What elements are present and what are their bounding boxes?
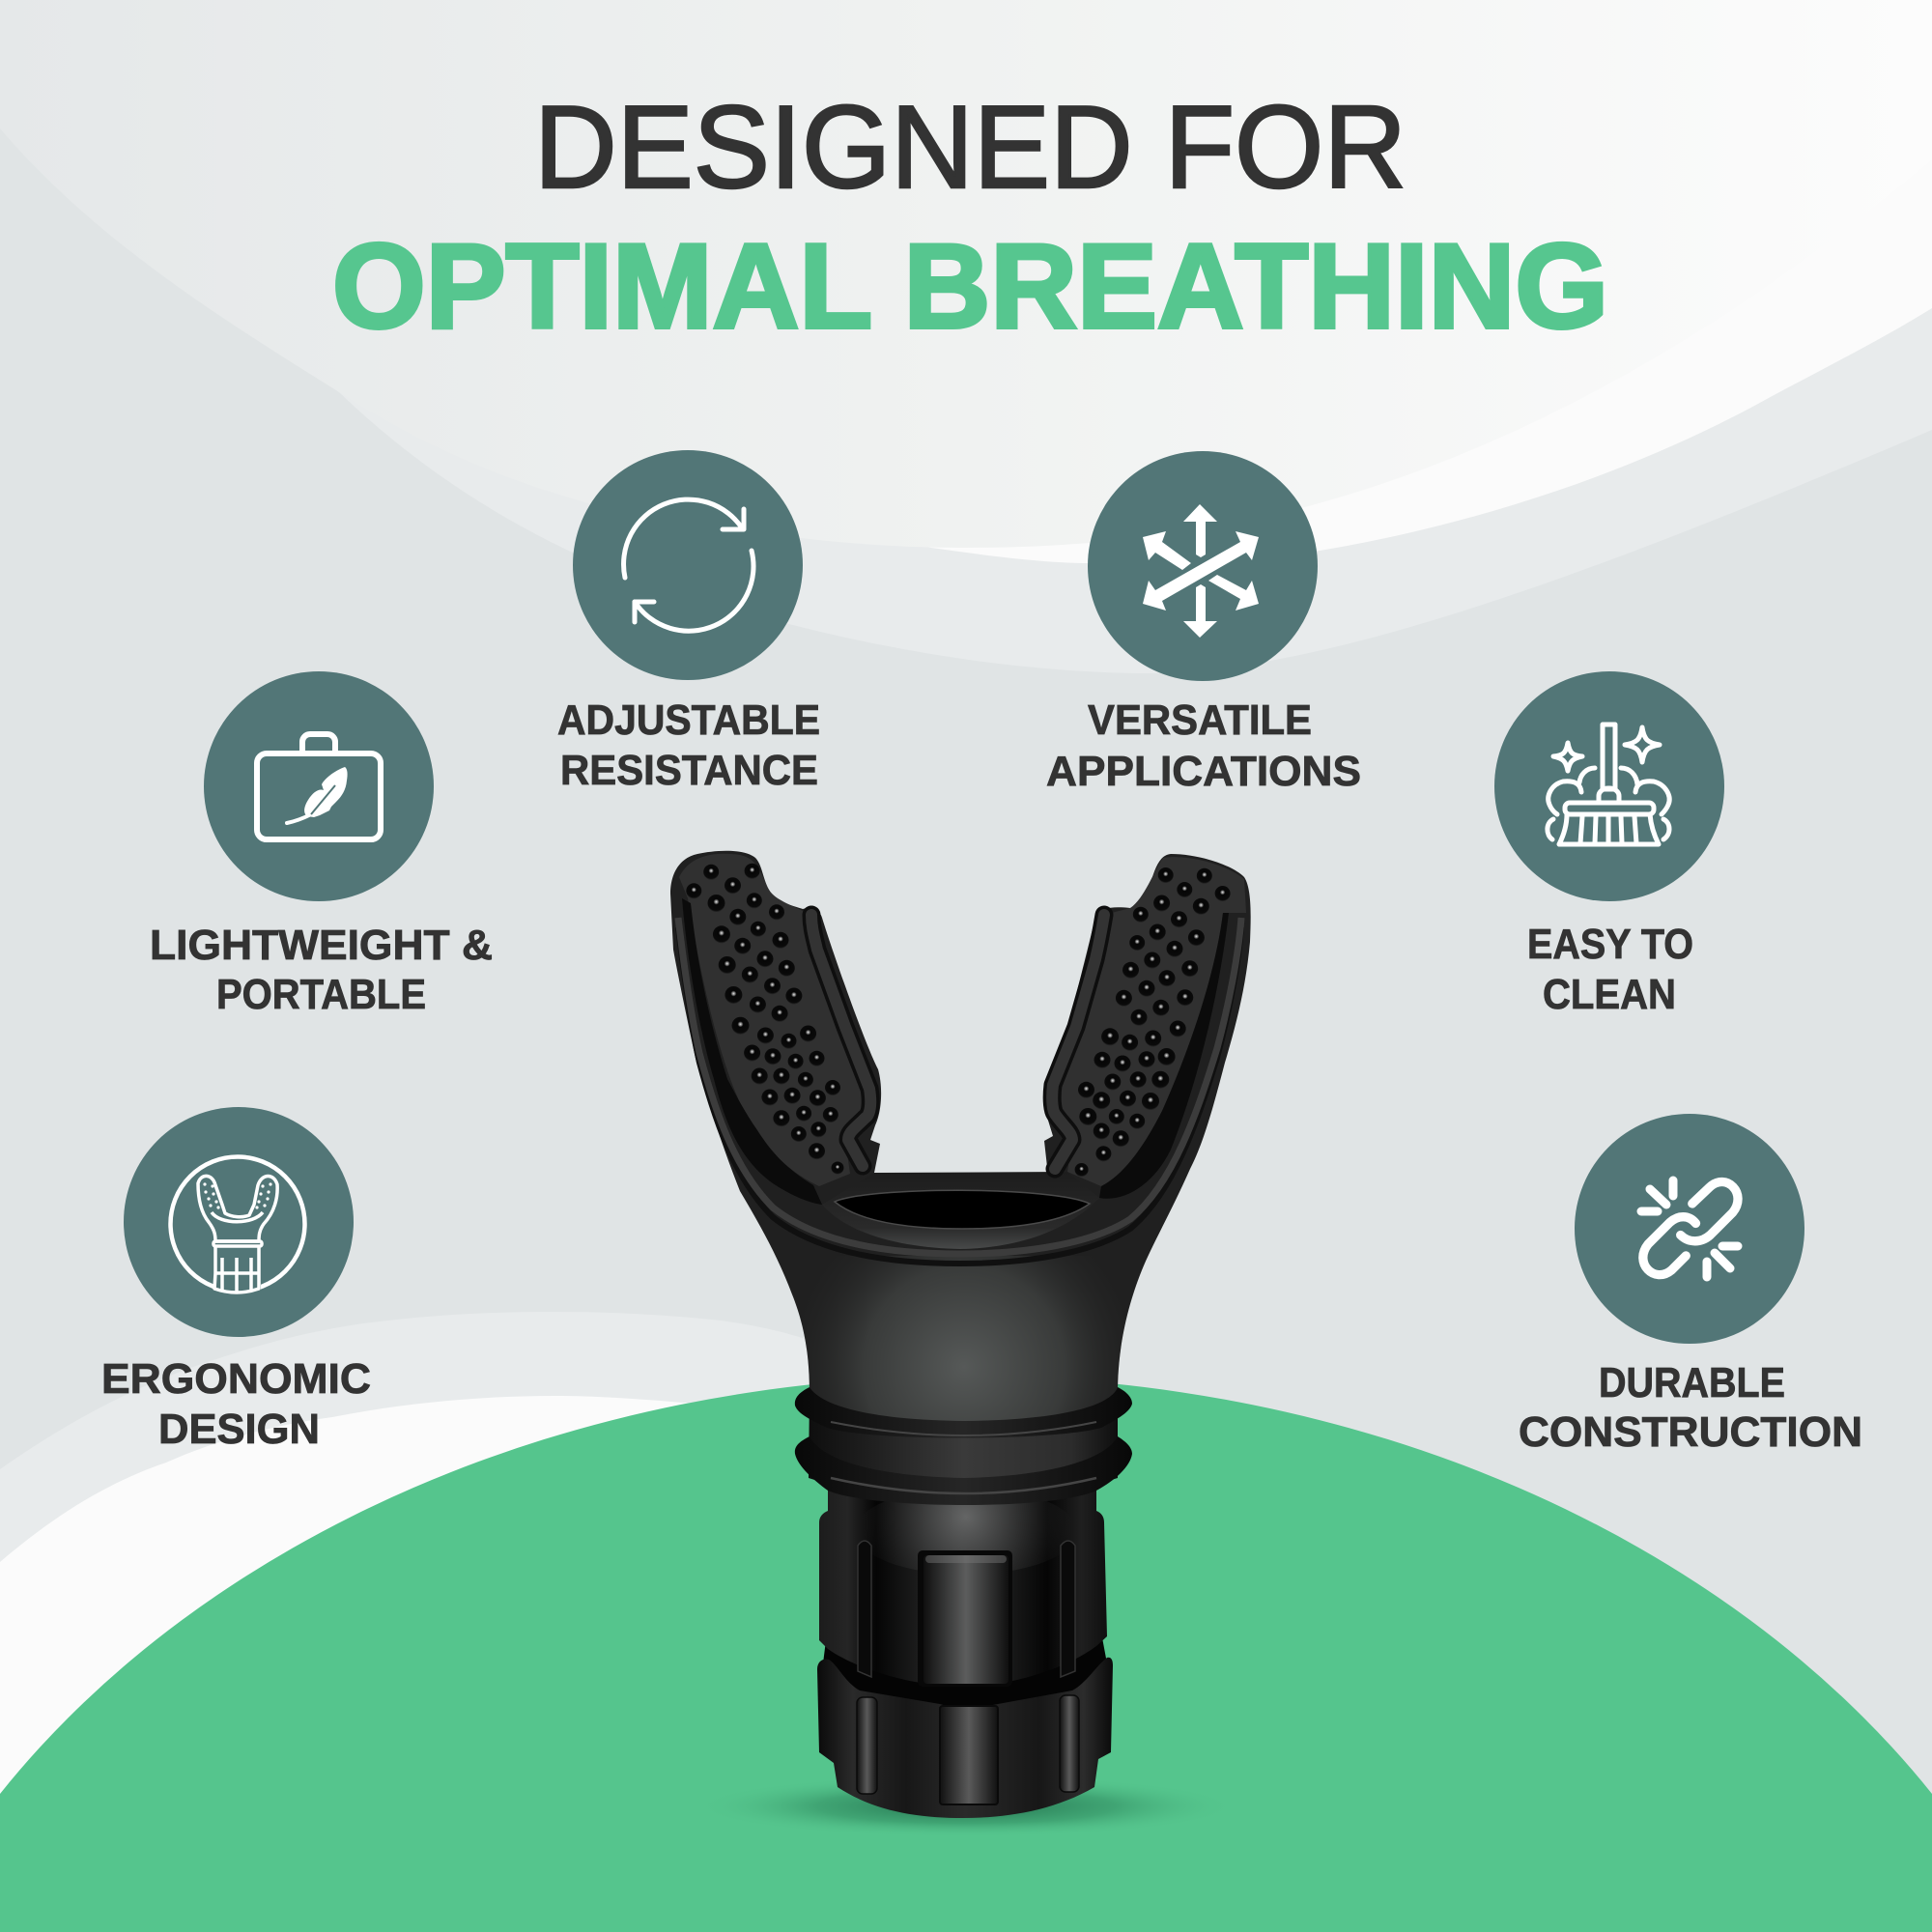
icon circle <box>1494 671 1724 901</box>
product: breathing trainer mouthpiece <box>670 851 1251 1818</box>
left flange highlight <box>811 915 870 1166</box>
label: RESISTANCE <box>560 747 818 794</box>
ring two highlight <box>831 1478 1096 1493</box>
label <box>150 922 493 1018</box>
right flange ridge <box>1052 915 1104 1169</box>
label <box>557 696 820 794</box>
icon circle <box>573 450 803 680</box>
collar side rib left <box>858 1541 871 1677</box>
label: VERSATILE <box>1088 696 1312 744</box>
label <box>1046 696 1361 795</box>
left flange ridge <box>811 915 870 1166</box>
nut side rib right <box>1060 1695 1079 1792</box>
ring one <box>795 1387 1132 1437</box>
icon: chain link <box>1641 1180 1738 1277</box>
background band: lower left white swoosh <box>0 1396 696 1835</box>
feature: lightweight and portable <box>150 671 493 1018</box>
label: CLEAN <box>1543 971 1676 1018</box>
label: ERGONOMIC <box>101 1355 371 1403</box>
rim shadow <box>678 927 1241 1264</box>
label: ADJUSTABLE <box>557 696 820 744</box>
label: DURABLE <box>1599 1359 1785 1406</box>
icon: broom with sparkles <box>1548 724 1669 844</box>
feature: easy to clean <box>1494 671 1724 1018</box>
label: CONSTRUCTION <box>1519 1408 1862 1456</box>
feature: durable construction <box>1519 1114 1862 1456</box>
icon: multi-directional arrows <box>1143 504 1259 638</box>
lower nut <box>817 1658 1113 1818</box>
collar highlight <box>855 1488 1077 1575</box>
rim highlight <box>678 918 1241 1254</box>
icon circle <box>1088 451 1318 681</box>
left pad <box>679 854 869 1186</box>
mouthpiece body <box>670 851 1251 1428</box>
icon circle <box>124 1107 354 1337</box>
label: DESIGN <box>158 1406 320 1453</box>
label: APPLICATIONS <box>1046 748 1361 795</box>
right flange highlight <box>1052 915 1104 1169</box>
left pad dots <box>686 864 844 1175</box>
product shadow <box>696 1776 1236 1837</box>
label <box>1519 1359 1862 1456</box>
title line 1: DESIGNED FOR <box>534 81 1406 213</box>
label: EASY TO <box>1527 921 1693 968</box>
label <box>101 1355 371 1453</box>
icon: mouthpiece in ring <box>170 1157 305 1293</box>
label: PORTABLE <box>216 971 426 1018</box>
feature: ergonomic design <box>101 1107 371 1453</box>
ring one highlight <box>831 1422 1096 1435</box>
right pad dots <box>1075 867 1231 1177</box>
bowl floor <box>822 1172 1099 1249</box>
background band: lower left grey swoosh <box>0 1312 811 1642</box>
icon circle <box>204 671 434 901</box>
neck highlight <box>773 1256 1150 1428</box>
icon: briefcase with feather <box>257 734 381 839</box>
nut side rib left <box>857 1697 877 1794</box>
title line 2: OPTIMAL BREATHING <box>332 220 1608 354</box>
nut center rib <box>940 1706 998 1804</box>
ring two <box>795 1436 1132 1505</box>
gap between collar and nut <box>823 1633 1107 1724</box>
title <box>332 81 1608 354</box>
background band: white swoosh <box>869 0 1932 566</box>
label: LIGHTWEIGHT & <box>150 922 493 969</box>
icon circle <box>1575 1114 1804 1344</box>
label <box>1527 921 1693 1018</box>
feature: adjustable resistance <box>557 450 820 794</box>
right pad <box>1053 857 1246 1186</box>
air opening <box>835 1190 1090 1229</box>
left recess channel <box>682 898 822 1205</box>
right recess channel <box>1099 913 1229 1199</box>
collar side rib right <box>1061 1541 1075 1677</box>
background band: upper grey swoosh <box>0 0 1932 673</box>
mid band between rings <box>809 1391 1118 1493</box>
icon: rotating arrows <box>624 499 753 631</box>
feature: versatile applications <box>1046 451 1361 795</box>
green dome <box>0 1377 1932 1932</box>
upper collar <box>819 1483 1107 1687</box>
collar center tab <box>918 1550 1012 1687</box>
background band: top gradient swoosh <box>0 0 1932 548</box>
